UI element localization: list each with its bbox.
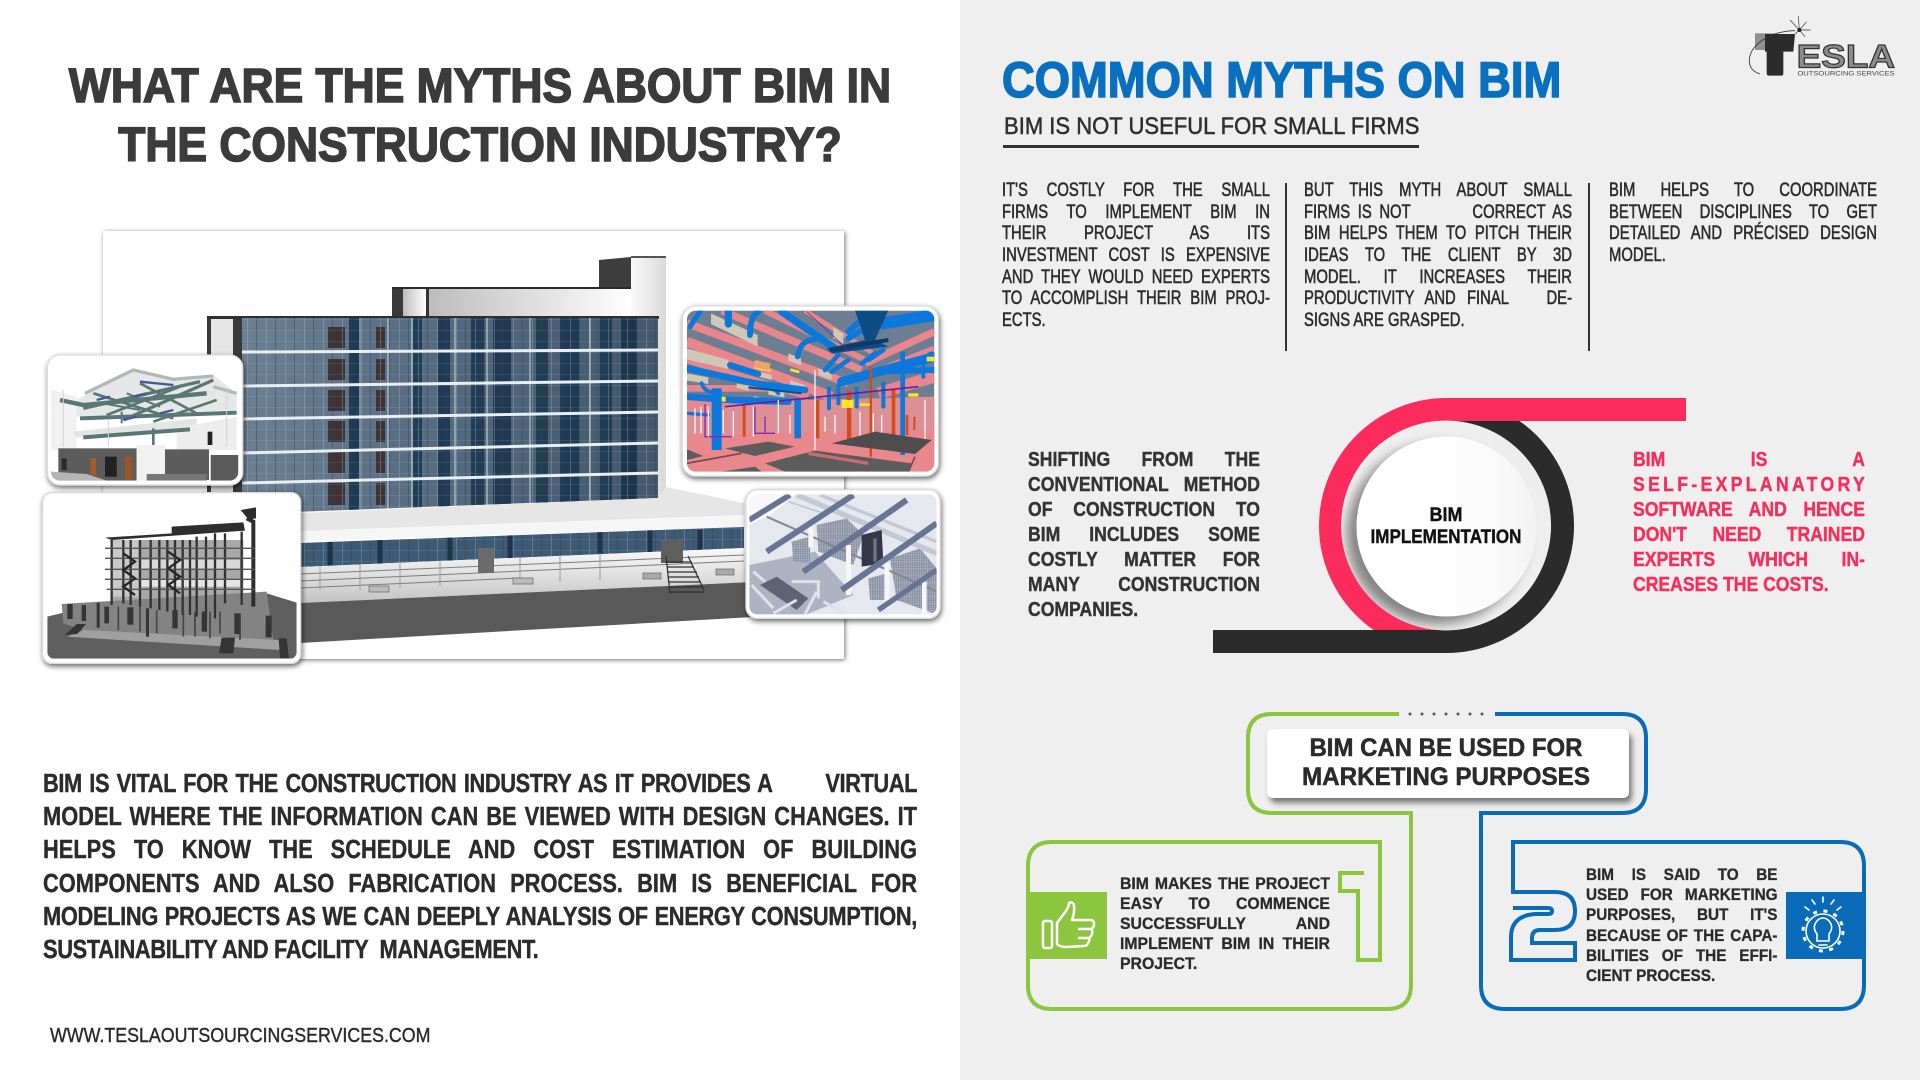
box 2 text: CIENT PROCESS. bbox=[1586, 966, 1715, 985]
column 3: coordination bbox=[1609, 180, 1877, 266]
thumbnail: structural frame model bbox=[43, 493, 301, 663]
right loop text: DON'T NEED TRAINED bbox=[1633, 524, 1865, 546]
body paragraph: BIM IS VITAL FOR THE CONSTRUCTION INDUSTRY AS IT PROVIDES A VIRTUAL bbox=[43, 768, 917, 798]
main building model bbox=[207, 256, 753, 643]
box 1 text: EASY TO COMMENCE bbox=[1120, 894, 1330, 913]
logo: Tesla Outsourcing Services: OUTSOURCING SERVICES bbox=[1797, 71, 1895, 78]
column 1: cost myth: IT'S COSTLY FOR THE SMALL bbox=[1002, 180, 1270, 201]
right loop text: EXPERTS WHICH IN- bbox=[1633, 548, 1865, 570]
column 2: myth rebuttal: IDEAS TO THE CLIENT BY 3D bbox=[1304, 245, 1572, 266]
left loop text bbox=[1028, 448, 1260, 620]
marketing flow: green and blue outlines bbox=[1028, 714, 1864, 1009]
loop centre label bbox=[1370, 505, 1522, 548]
column 2: myth rebuttal: PRODUCTIVITY AND FINAL DE- bbox=[1304, 288, 1572, 309]
divider bbox=[1285, 183, 1287, 351]
marketing title text bbox=[1302, 734, 1590, 791]
body paragraph: COMPONENTS AND ALSO FABRICATION PROCESS. BIM IS BENEFICIAL FOR bbox=[43, 868, 917, 898]
subheading with underline: BIM IS NOT USEFUL FOR SMALL FIRMS bbox=[1004, 113, 1419, 140]
column 3: coordination: BETWEEN DISCIPLINES TO GET bbox=[1609, 202, 1877, 223]
right loop text: CREASES THE COSTS. bbox=[1633, 574, 1829, 596]
column 1: cost myth: TO ACCOMPLISH THEIR BIM PROJ- bbox=[1002, 288, 1270, 309]
box 2 text: BILITIES OF THE EFFI- bbox=[1586, 946, 1778, 965]
logo: Tesla Outsourcing Services: ESLA bbox=[1797, 37, 1895, 74]
column 1: cost myth: THEIR PROJECT AS ITS bbox=[1002, 223, 1270, 244]
left loop text: COMPANIES. bbox=[1028, 598, 1138, 620]
heading: common myths: COMMON MYTHS ON BIM bbox=[1002, 52, 1561, 108]
column 3: coordination: DETAILED AND PRÉCISED DESIGN bbox=[1609, 223, 1877, 244]
podium glazing strip bbox=[300, 527, 744, 567]
column 1: cost myth: AND THEY WOULD NEED EXPERTS bbox=[1002, 267, 1270, 288]
body paragraph: MODEL WHERE THE INFORMATION CAN BE VIEWED WITH DESIGN CHANGES. IT bbox=[43, 801, 917, 831]
box 2 text: BECAUSE OF THE CAPA- bbox=[1586, 926, 1778, 945]
title bbox=[68, 60, 891, 172]
podium fascia bbox=[300, 487, 744, 541]
marketing title card bbox=[1267, 729, 1629, 798]
column 1: cost myth: INVESTMENT COST IS EXPENSIVE bbox=[1002, 245, 1270, 266]
column 1: cost myth: ECTS. bbox=[1002, 310, 1046, 331]
diagram: BIM implementation loop bbox=[1026, 398, 1866, 1011]
right loop text bbox=[1633, 448, 1868, 596]
panel: left white panel bbox=[39, 68, 946, 1042]
box 2 text: BIM IS SAID TO BE bbox=[1586, 865, 1778, 884]
column 2: myth rebuttal: BUT THIS MYTH ABOUT SMALL bbox=[1304, 180, 1572, 201]
box 2 text bbox=[1586, 865, 1778, 985]
ground plane bbox=[300, 582, 753, 643]
column 2: myth rebuttal bbox=[1304, 180, 1572, 331]
thumbnail: grey duct and equipment model bbox=[746, 490, 940, 618]
illustration: BIM building model with detail thumbnails bbox=[39, 228, 946, 670]
title: THE CONSTRUCTION INDUSTRY? bbox=[118, 119, 842, 172]
left loop text: COSTLY MATTER FOR bbox=[1028, 548, 1260, 570]
body paragraph: SUSTAINABILITY AND FACILITY MANAGEMENT. bbox=[43, 934, 538, 964]
loop centre label: IMPLEMENTATION bbox=[1370, 527, 1522, 548]
box 1 text: IMPLEMENT BIM IN THEIR bbox=[1120, 934, 1330, 953]
right loop text: BIM IS A bbox=[1633, 448, 1865, 470]
podium wall bbox=[300, 548, 753, 603]
thumbnail: MEP over building floor bbox=[47, 355, 243, 485]
column 2: myth rebuttal: BIM HELPS THEM TO PITCH THEIR bbox=[1304, 223, 1572, 244]
logo: Tesla Outsourcing Services bbox=[1748, 16, 1895, 78]
body paragraph bbox=[43, 768, 917, 964]
entrance stair bbox=[666, 556, 704, 594]
website footer: WWW.TESLAOUTSOURCINGSERVICES.COM bbox=[50, 1025, 430, 1047]
left loop text: MANY CONSTRUCTION bbox=[1028, 574, 1260, 596]
thumbnail: coloured MEP interior bbox=[682, 306, 938, 476]
box 1 text: PROJECT. bbox=[1120, 954, 1197, 973]
icon: thumbs up on green block bbox=[1028, 892, 1107, 959]
column 1: cost myth: FIRMS TO IMPLEMENT BIM IN bbox=[1002, 202, 1270, 223]
column 2: myth rebuttal: FIRMS IS NOT CORRECT AS bbox=[1304, 202, 1572, 223]
left loop text: SHIFTING FROM THE bbox=[1028, 448, 1260, 470]
column 3: coordination: MODEL. bbox=[1609, 245, 1666, 266]
icon: gear with light bulb on blue block bbox=[1786, 892, 1864, 959]
box 2 text: PURPOSES, BUT IT'S bbox=[1586, 905, 1778, 924]
box 1 text: SUCCESSFULLY AND bbox=[1120, 914, 1330, 933]
marketing title text: BIM CAN BE USED FOR bbox=[1310, 734, 1582, 762]
body paragraph: HELPS TO KNOW THE SCHEDULE AND COST ESTIMATION OF BUILDING bbox=[43, 834, 917, 864]
right loop text: SELF-EXPLANATORY bbox=[1633, 474, 1868, 496]
marketing title text: MARKETING PURPOSES bbox=[1302, 763, 1590, 791]
panel: right grey panel bbox=[960, 0, 1920, 1080]
column 3: coordination: BIM HELPS TO COORDINATE bbox=[1609, 180, 1877, 201]
loop centre label: BIM bbox=[1430, 505, 1462, 526]
right loop text: SOFTWARE AND HENCE bbox=[1633, 498, 1865, 520]
box 1 text bbox=[1120, 874, 1330, 973]
divider bbox=[1588, 183, 1590, 351]
column 2: myth rebuttal: SIGNS ARE GRASPED. bbox=[1304, 310, 1465, 331]
left loop text: BIM INCLUDES SOME bbox=[1028, 524, 1260, 546]
column 1: cost myth bbox=[1002, 180, 1270, 331]
title: WHAT ARE THE MYTHS ABOUT BIM IN bbox=[69, 60, 891, 113]
box 2 text: USED FOR MARKETING bbox=[1586, 885, 1778, 904]
body paragraph: MODELING PROJECTS AS WE CAN DEEPLY ANALYSIS OF ENERGY CONSUMPTION, bbox=[43, 901, 917, 931]
box 1 text: BIM MAKES THE PROJECT bbox=[1120, 874, 1330, 892]
left loop text: CONVENTIONAL METHOD bbox=[1028, 474, 1260, 496]
column 2: myth rebuttal: MODEL. IT INCREASES THEIR bbox=[1304, 267, 1572, 288]
white frame behind the building bbox=[103, 231, 844, 659]
left loop text: OF CONSTRUCTION TO bbox=[1028, 498, 1260, 520]
